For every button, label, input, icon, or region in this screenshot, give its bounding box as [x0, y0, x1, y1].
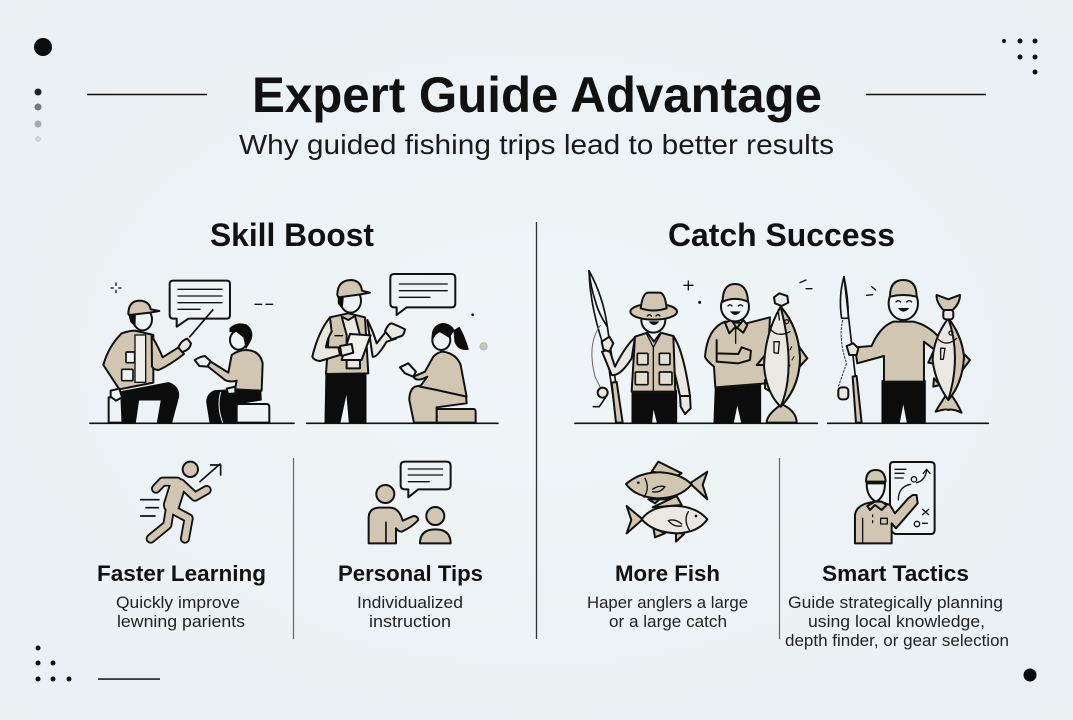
panel: catch success illustrations: [575, 271, 988, 423]
decorative dots: bottom left: [36, 646, 160, 682]
decorative dots: top left: [34, 38, 52, 142]
heading: Skill Boost: Skill Boost: [210, 217, 374, 253]
text: Smart Tactics description: Guide strategically planning: [788, 593, 1003, 612]
icon: two fish: [626, 462, 707, 542]
text: More Fish description: or a large catch: [609, 612, 727, 631]
panel: skill boost illustrations: [90, 274, 498, 423]
icon: running figure with arrow: [141, 462, 221, 539]
icon: two people with speech bubble: [369, 462, 451, 543]
text: Faster Learning description: [116, 593, 245, 631]
text: Faster Learning description: lewning parients: [117, 612, 245, 631]
icon: guide with tactics board: [855, 462, 935, 543]
illustration: guide holding large fish: [705, 284, 770, 423]
panel: Faster Learning: [97, 462, 266, 631]
heading: Smart Tactics: Smart Tactics: [822, 561, 969, 586]
illustration: guide with clipboard: [312, 280, 405, 423]
title: Expert Guide Advantage: [252, 67, 822, 123]
subtitle: Why guided fishing trips lead to better results: [239, 129, 834, 160]
illustration: caught fish: [928, 295, 970, 413]
text: Smart Tactics description: using local knowledge,: [808, 612, 985, 631]
speech bubble with lines: [170, 281, 230, 337]
panel: Smart Tactics: [785, 462, 1009, 650]
illustration: angler with rod and fish: [838, 277, 940, 423]
vest pockets: [635, 353, 672, 385]
text: More Fish description: Haper anglers a large: [587, 593, 748, 612]
heading: Faster Learning: Faster Learning: [97, 561, 266, 586]
speech bubble with lines: [390, 274, 455, 315]
panel: Personal Tips: [338, 462, 483, 631]
illustration: angler in hat with rod: [589, 271, 691, 423]
text: Personal Tips description: instruction: [369, 612, 451, 631]
illustration: seated student: [195, 324, 269, 423]
panel: More Fish: [587, 462, 748, 631]
text: Faster Learning description: Quickly improve: [116, 593, 240, 612]
text: Personal Tips description: [357, 593, 463, 631]
illustration: seated woman with ponytail: [400, 323, 476, 423]
heading: Personal Tips: Personal Tips: [338, 561, 483, 586]
illustration: guide with pointer: [103, 301, 191, 423]
text: Personal Tips description: Individualized: [357, 593, 463, 612]
text: More Fish description: [587, 593, 748, 631]
text: Smart Tactics description: depth finder, or gear selection: [785, 631, 1009, 650]
heading: Catch Success: Catch Success: [668, 217, 895, 253]
heading: More Fish: More Fish: [615, 561, 720, 586]
decorative dot: bottom right: [1024, 668, 1036, 682]
illustration: large fish: [757, 293, 807, 423]
text: Smart Tactics description: [785, 593, 1009, 650]
decorative dots: top right: [1002, 38, 1038, 74]
